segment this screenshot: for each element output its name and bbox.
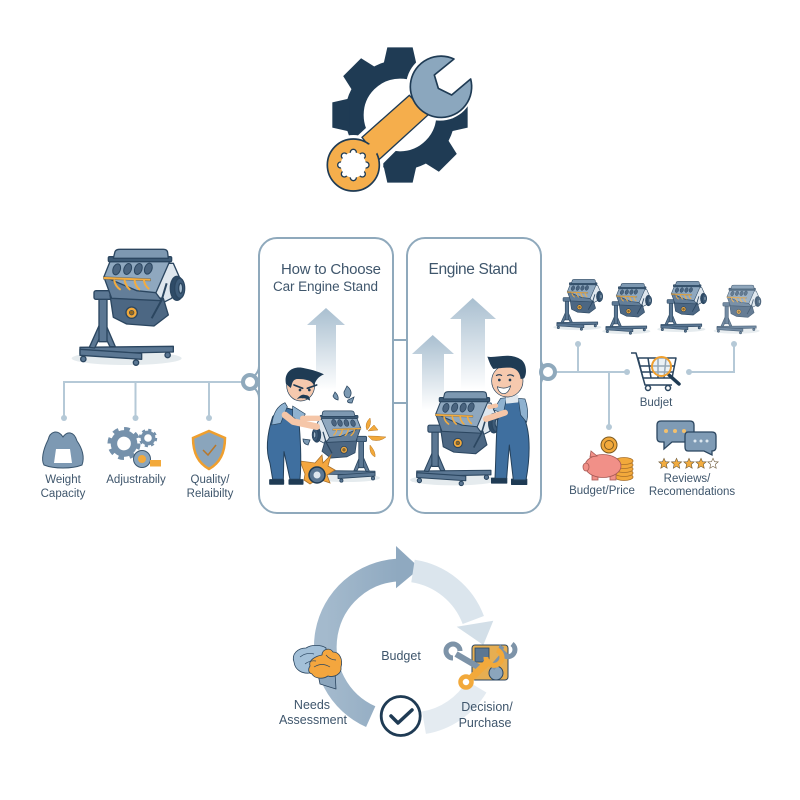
icon: tools and engine	[446, 644, 515, 688]
icon: piggy bank and price	[569, 437, 635, 497]
arrow: short up	[412, 335, 454, 410]
arrow: up	[307, 308, 345, 390]
label: weight capacity	[41, 432, 86, 500]
label: decision purchase	[459, 700, 513, 730]
icon: check circle	[381, 696, 420, 736]
label: needs assessment: Assessment	[279, 713, 348, 727]
heading: how to choose: How to Choose	[281, 261, 381, 278]
arrow: tall up	[450, 298, 496, 390]
illustration: impact burst	[300, 455, 335, 484]
illustration: working stand	[410, 392, 500, 486]
icon: reviews and stars: Reviews/	[664, 473, 711, 485]
label: adjustability	[106, 429, 166, 486]
icon: reviews and stars: Recomendations	[649, 486, 735, 498]
character: frustrated mechanic	[267, 367, 324, 484]
panel: engine stand	[407, 238, 544, 513]
character: happy mechanic	[486, 356, 529, 484]
heading: how to choose	[273, 261, 381, 294]
icon: cart with magnifier: Budjet	[640, 397, 673, 409]
icon: gear and wrench logo	[323, 47, 480, 195]
heading: engine stand: Engine Stand	[428, 261, 518, 278]
label: decision purchase: Decision/	[461, 700, 513, 714]
illustration: broken stand	[312, 411, 380, 482]
label: needs assessment	[279, 698, 348, 727]
arrow: top right arc	[413, 571, 493, 645]
arrow: bottom right arc	[424, 687, 477, 723]
illustration: splashes	[303, 386, 386, 457]
arrow: left arc	[325, 546, 420, 717]
heading: how to choose: Car Engine Stand	[273, 279, 378, 294]
label: quality reliability	[187, 431, 234, 500]
notch: left panel	[254, 366, 259, 398]
connector lines: right	[555, 341, 737, 430]
icon: dark gear	[332, 47, 468, 183]
label: budget: Budget	[381, 649, 421, 663]
icon: wrench	[323, 50, 480, 195]
label: weight capacity: Weight	[45, 474, 82, 486]
illustration: row of four stands	[553, 279, 761, 334]
icon: cart with magnifier	[631, 353, 679, 409]
connector lines: left	[61, 382, 243, 421]
label: decision purchase: Purchase	[459, 716, 511, 730]
label: adjustability: Adjustrabily	[106, 474, 166, 486]
label: quality reliability: Relaibilty	[187, 488, 234, 500]
icon: piggy bank and price: Budget/Price	[569, 485, 635, 497]
notch: right panel	[541, 360, 544, 384]
illustration: large engine on stand	[72, 249, 185, 365]
label: needs assessment: Needs	[294, 698, 330, 712]
label: weight capacity: Capacity	[41, 488, 86, 500]
node ring: right	[541, 365, 555, 379]
node ring: left	[243, 375, 257, 389]
icon: reviews and stars	[649, 421, 735, 498]
panel: how to choose	[254, 238, 393, 513]
cycle diagram	[279, 546, 515, 736]
connector: between panels	[393, 340, 407, 403]
label: quality reliability: Quality/	[190, 474, 230, 486]
icon: brain	[293, 645, 342, 689]
